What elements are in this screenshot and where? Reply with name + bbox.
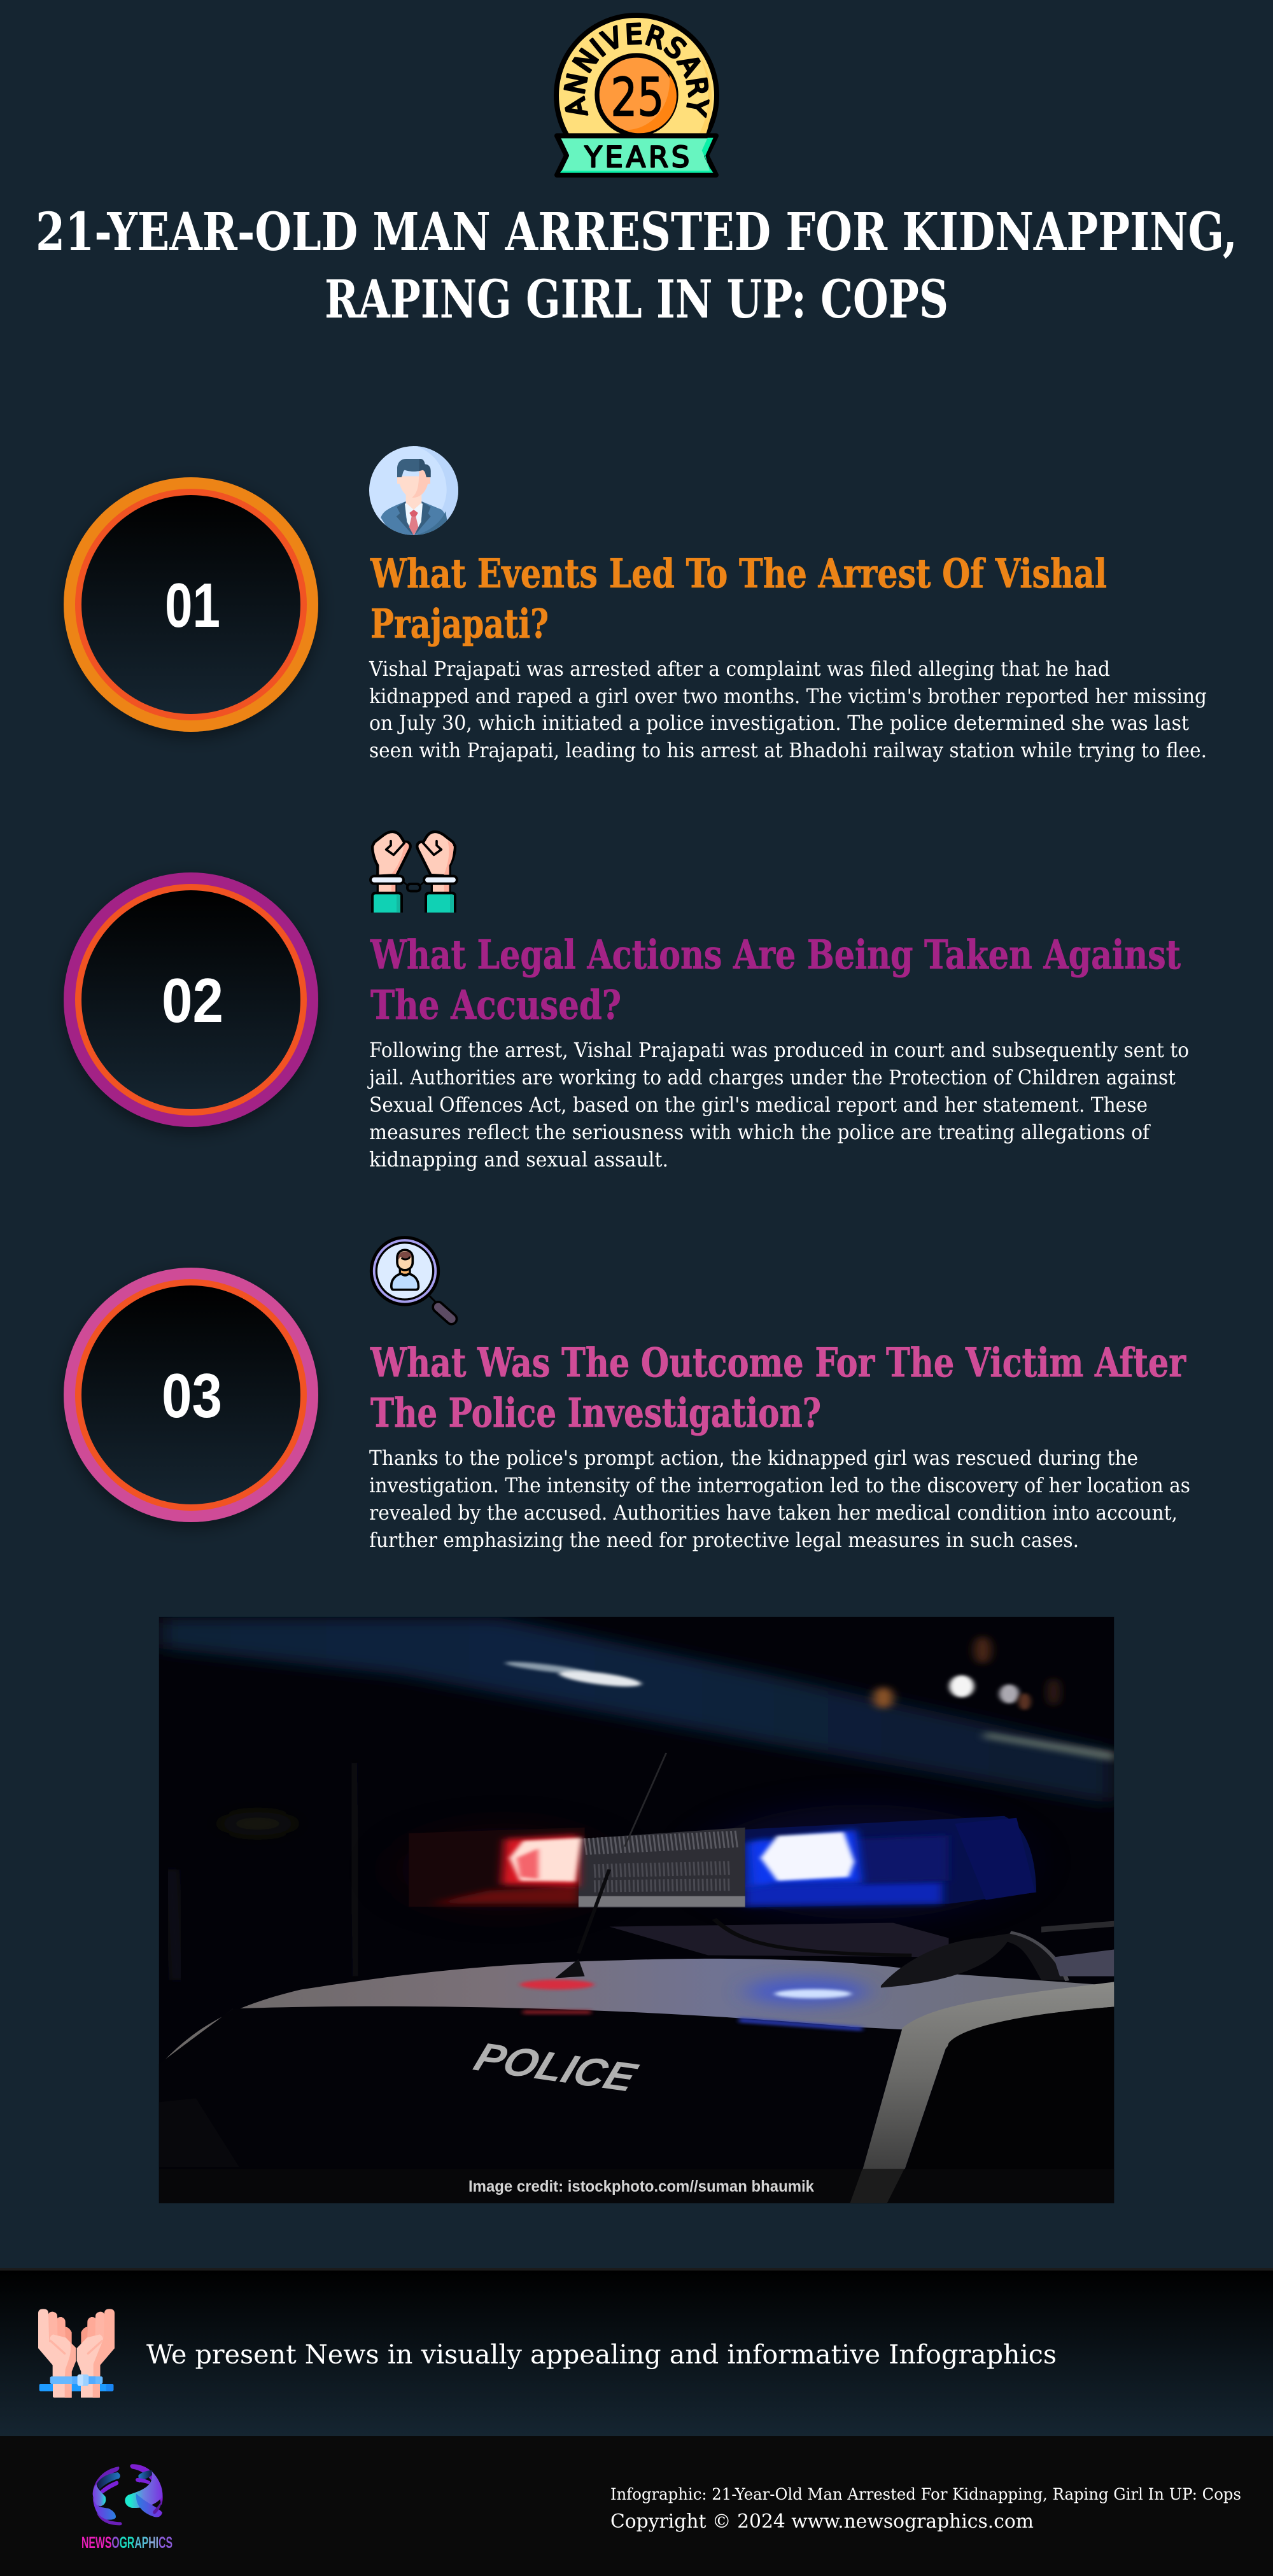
icon: 25 years anniversary badge [554,13,719,178]
panel: section 02 [64,832,1189,1172]
body text 02: Following the arrest, Vishal Prajapati was produced in court and subsequently sent to [369,1038,1189,1062]
number badge 01: 01 [165,570,220,640]
icon: 25 years anniversary badge: ANNIVERSARY [563,22,710,118]
logo wordmark: NEWSOGRAPHICS [81,2534,172,2552]
icon: 25 years anniversary badge: YEARS [584,140,689,174]
heading 01 [370,550,1107,647]
body text 01: Vishal Prajapati was arrested after a complaint was filed alleging that he had [369,657,1110,681]
body text 02 [367,1038,1189,1172]
body text 03: revealed by the accused. Authorities have taken her medical condition into account, [369,1501,1178,1525]
icon: magnifying glass over person [371,1238,451,1319]
number badge 03 [64,1268,318,1522]
heading 03 [370,1339,1186,1436]
body text 02: measures reflect the seriousness with which the police are treating allegations of [369,1120,1151,1144]
icon: handcuffed fists [370,832,457,913]
panel: section 01 [64,446,1207,762]
footer text: Infographic: 21-Year-Old Man Arrested For Kidnapping, Raping Girl In UP: Cops [610,2485,1241,2503]
icon: 25 years anniversary badge: 25 [610,67,664,129]
number badge 03: 03 [162,1361,222,1431]
title [36,202,1237,330]
title: RAPING GIRL IN UP: COPS [325,269,948,330]
number badge 02 [64,872,318,1127]
photo: police car with light bar [159,1617,1114,2203]
body text 02: jail. Authorities are working to add charges under the Protection of Children against [367,1065,1176,1089]
tagline text: We present News in visually appealing and informative Infographics [146,2339,1057,2370]
icon: businessman avatar [369,446,458,543]
body text 01: seen with Prajapati, leading to his arrest at Bhadohi railway station while trying to flee. [369,738,1207,762]
body text 03 [369,1446,1190,1552]
number badge 02: 02 [162,965,223,1035]
body text 03: Thanks to the police's prompt action, the kidnapped girl was rescued during the [369,1446,1138,1470]
body text 01: on July 30, which initiated a police investigation. The police determined she was last [369,711,1189,735]
icon: open hands with cuffs [38,2309,115,2398]
logo: newsographics [81,2464,172,2552]
body text 03: investigation. The intensity of the interrogation led to the discovery of her location as [369,1473,1190,1497]
police lettering on the car window: POLICE [468,2034,644,2100]
footer text [610,2485,1241,2533]
body text 01 [369,657,1207,762]
body text 02: kidnapping and sexual assault. [369,1147,668,1172]
heading 01: Prajapati? [370,600,549,647]
heading 01: What Events Led To The Arrest Of Vishal [370,550,1107,597]
number badge 01 [64,477,318,732]
panel: section 03 [64,1238,1190,1552]
tagline band [0,2268,1273,2436]
footer text: Copyright © 2024 www.newsographics.com [610,2510,1034,2533]
heading 02: The Accused? [370,981,621,1028]
heading 02 [370,931,1181,1028]
body text 02: Sexual Offences Act, based on the girl's medical report and her statement. These [369,1093,1148,1117]
body text 03: further emphasizing the need for protective legal measures in such cases. [369,1528,1079,1552]
heading 03: The Police Investigation? [370,1389,821,1436]
footer [0,2436,1273,2576]
body text 01: kidnapped and raped a girl over two months. The victim's brother reported her missing [369,684,1207,708]
image credit: Image credit: istockphoto.com//suman bhaumik [468,2178,814,2195]
